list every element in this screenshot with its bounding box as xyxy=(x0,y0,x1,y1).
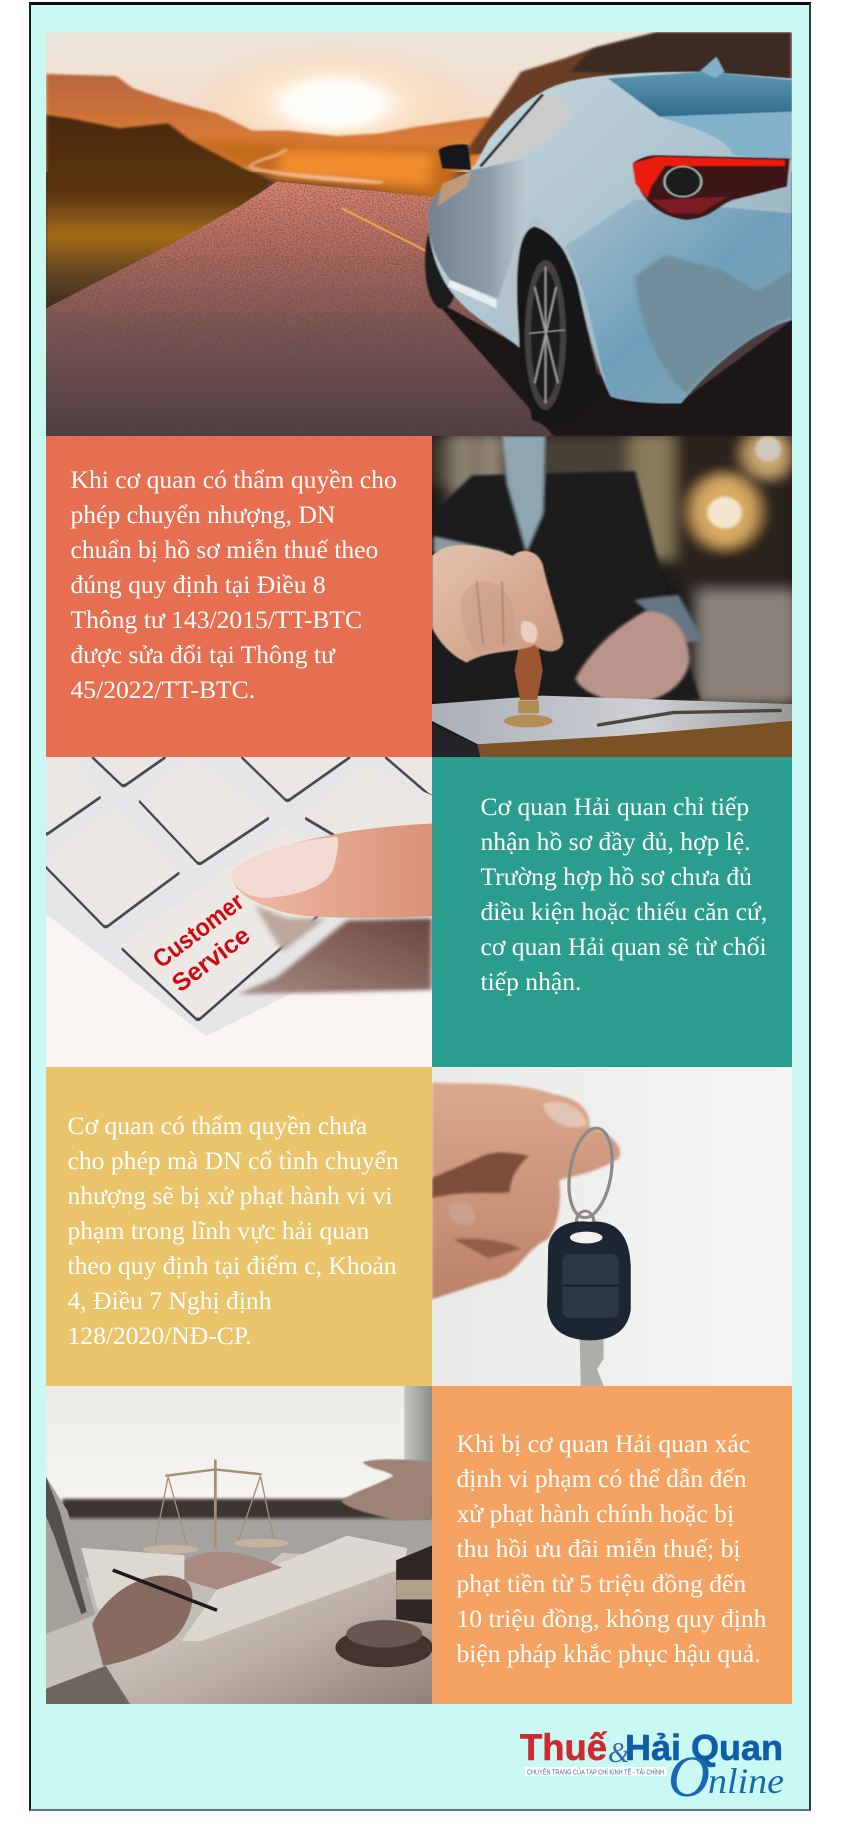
text: chuẩn bị hồ sơ miễn thuế: phép chuyển nhượng, DN xyxy=(70,500,335,529)
text: chuẩn bị hồ sơ miễn thuế: Thông tư 143/2015/TT-BTC xyxy=(70,605,362,634)
suit and shirt xyxy=(432,436,703,700)
window background xyxy=(46,1386,432,1504)
keys xyxy=(46,754,432,926)
text: tiếp nhận hồ sơ: cơ quan Hải quan sẽ từ chối xyxy=(480,932,767,961)
text: chuẩn bị hồ sơ miễn thuế: Khi cơ quan có thẩm quyền cho xyxy=(70,465,397,494)
text: tiếp nhận hồ sơ: tiếp nhận. xyxy=(480,967,581,996)
text: xử phạt vi phạm: 4, Điều 7 Nghị định xyxy=(68,1286,272,1315)
logo tagline strip: CHUYÊN TRANG CỦA TẠP CHÍ KINH TẾ - TÀI CHÍNH xyxy=(527,1766,664,1776)
desk xyxy=(108,1553,432,1704)
key photo background xyxy=(432,1067,792,1386)
text: xử phạt hành chính: thu hồi ưu đãi miễn thuế; bị xyxy=(456,1534,740,1563)
text: tiếp nhận hồ sơ: nhận hồ sơ đầy đủ, hợp lệ. xyxy=(480,827,751,856)
key label text: Customer xyxy=(148,887,249,974)
rear deck xyxy=(660,112,792,160)
text: xử phạt hành chính: biện pháp khắc phục hậu quả. xyxy=(456,1639,761,1668)
car xyxy=(425,57,792,430)
side windows xyxy=(480,95,574,167)
distant road curve xyxy=(249,148,385,184)
panel: text block 3 yellow xyxy=(46,1067,432,1386)
front wheel xyxy=(425,214,460,309)
text: xử phạt vi phạm: theo quy định tại điểm c, Khoản xyxy=(68,1251,397,1280)
text: xử phạt hành chính: định vi phạm có thể dẫn đến xyxy=(456,1464,746,1493)
text: tiếp nhận hồ sơ xyxy=(480,792,767,996)
golden field xyxy=(184,140,467,203)
roadside vegetation xyxy=(46,115,271,310)
text: xử phạt vi phạm: 128/2020/NĐ-CP. xyxy=(68,1321,252,1350)
panel: photo of lawyer, scales and gavel xyxy=(46,1386,432,1704)
key ring xyxy=(563,1126,618,1233)
finger xyxy=(231,824,432,918)
panel: text block 1 coral xyxy=(46,436,432,757)
text: chuẩn bị hồ sơ miễn thuế xyxy=(70,465,397,704)
open hand gesture xyxy=(341,1459,432,1521)
scales of justice xyxy=(143,1460,289,1554)
paper on clipboard xyxy=(432,696,792,757)
wall and dark window sill xyxy=(46,1499,432,1577)
customer service key xyxy=(125,830,347,1019)
text: xử phạt hành chính: Khi bị cơ quan Hải quan xác xyxy=(456,1429,750,1458)
car body xyxy=(428,72,792,403)
text: tiếp nhận hồ sơ: Trường hợp hồ sơ chưa đủ xyxy=(480,862,752,891)
logo words Hải Quan: Hải Quan xyxy=(625,1727,783,1768)
key blade xyxy=(580,1338,604,1386)
key tops xyxy=(46,754,432,923)
text: xử phạt hành chính: 10 triệu đồng, không quy định xyxy=(456,1604,766,1633)
logo word Thuế: Thuế xyxy=(520,1727,607,1768)
logo: Thuế & Hải Quan Online xyxy=(520,1727,784,1805)
wheel arch xyxy=(517,227,603,430)
orange door reflection xyxy=(437,172,472,207)
text: xử phạt hành chính xyxy=(456,1429,766,1668)
text: xử phạt vi phạm: nhượng sẽ bị xử phạt hành vi vi xyxy=(68,1181,392,1210)
rear quarter panel xyxy=(565,199,792,403)
text: tiếp nhận hồ sơ: Cơ quan Hải quan chỉ tiếp xyxy=(480,792,749,821)
hand xyxy=(432,1082,620,1299)
text: chuẩn bị hồ sơ miễn thuế: đúng quy định tại Điều 8 xyxy=(70,570,326,599)
key fob xyxy=(547,1221,631,1340)
hand shadow on keyboard xyxy=(239,918,432,994)
spoiler fin xyxy=(700,57,725,78)
side sill highlight xyxy=(448,280,497,308)
logo tagline strip xyxy=(525,1766,667,1776)
text: chuẩn bị hồ sơ miễn thuế: chuẩn bị hồ sơ miễn thuế theo xyxy=(70,535,378,564)
key label text: Service xyxy=(167,921,256,998)
panel: photo of hand stamping document xyxy=(432,436,792,757)
logo word Online: nline xyxy=(708,1761,784,1801)
panel: hero photo of car on sunset road xyxy=(46,32,792,436)
panel: text block 2 teal xyxy=(432,757,792,1067)
car door side xyxy=(428,159,529,298)
rear window xyxy=(608,72,792,117)
text: xử phạt vi phạm: Cơ quan có thẩm quyền chưa xyxy=(68,1111,367,1140)
stamp handle and base xyxy=(504,641,553,727)
blurred office background xyxy=(432,431,798,704)
text: xử phạt vi phạm: phạm trong lĩnh vực hải quan xyxy=(68,1216,369,1245)
text: xử phạt hành chính: phạt tiền từ 5 triệu đồng đến xyxy=(456,1569,746,1598)
panel: text block 4 orange xyxy=(432,1386,792,1704)
key shadows xyxy=(46,757,432,926)
bokeh lights xyxy=(707,436,781,529)
rear wheel xyxy=(519,239,580,427)
fist holding stamp xyxy=(432,545,563,663)
car shadow xyxy=(434,300,792,436)
wing mirror xyxy=(439,144,471,170)
text: chuẩn bị hồ sơ miễn thuế: 45/2022/TT-BTC. xyxy=(70,675,255,704)
body panel behind door xyxy=(498,213,565,348)
writing hands and pen xyxy=(92,1552,282,1666)
tail light xyxy=(632,155,790,220)
text: tiếp nhận hồ sơ: điều kiện hoặc thiếu căn cứ, xyxy=(480,897,767,926)
keyboard base xyxy=(46,757,432,1067)
text: chuẩn bị hồ sơ miễn thuế: được sửa đổi tại Thông tư xyxy=(70,640,335,669)
panel: photo of keyboard customer service key xyxy=(46,757,432,1067)
text: xử phạt hành chính: xử phạt hành chính hoặc bị xyxy=(456,1499,734,1528)
background hand xyxy=(575,611,689,704)
text: xử phạt vi phạm xyxy=(68,1111,399,1350)
distant hills xyxy=(46,32,792,167)
gavel xyxy=(335,1545,433,1667)
sky with sun xyxy=(46,32,792,172)
logo word Online xyxy=(668,1744,784,1809)
text: xử phạt vi phạm: cho phép mà DN cố tình chuyển xyxy=(68,1146,399,1175)
logo ampersand: & xyxy=(608,1738,630,1769)
contract on clipboard xyxy=(182,1536,407,1641)
mountain reflection on panel xyxy=(635,255,792,393)
lawyer sleeve and shirt xyxy=(46,1477,184,1704)
panel: photo of hand holding car key xyxy=(432,1067,792,1386)
asphalt road xyxy=(46,180,597,437)
